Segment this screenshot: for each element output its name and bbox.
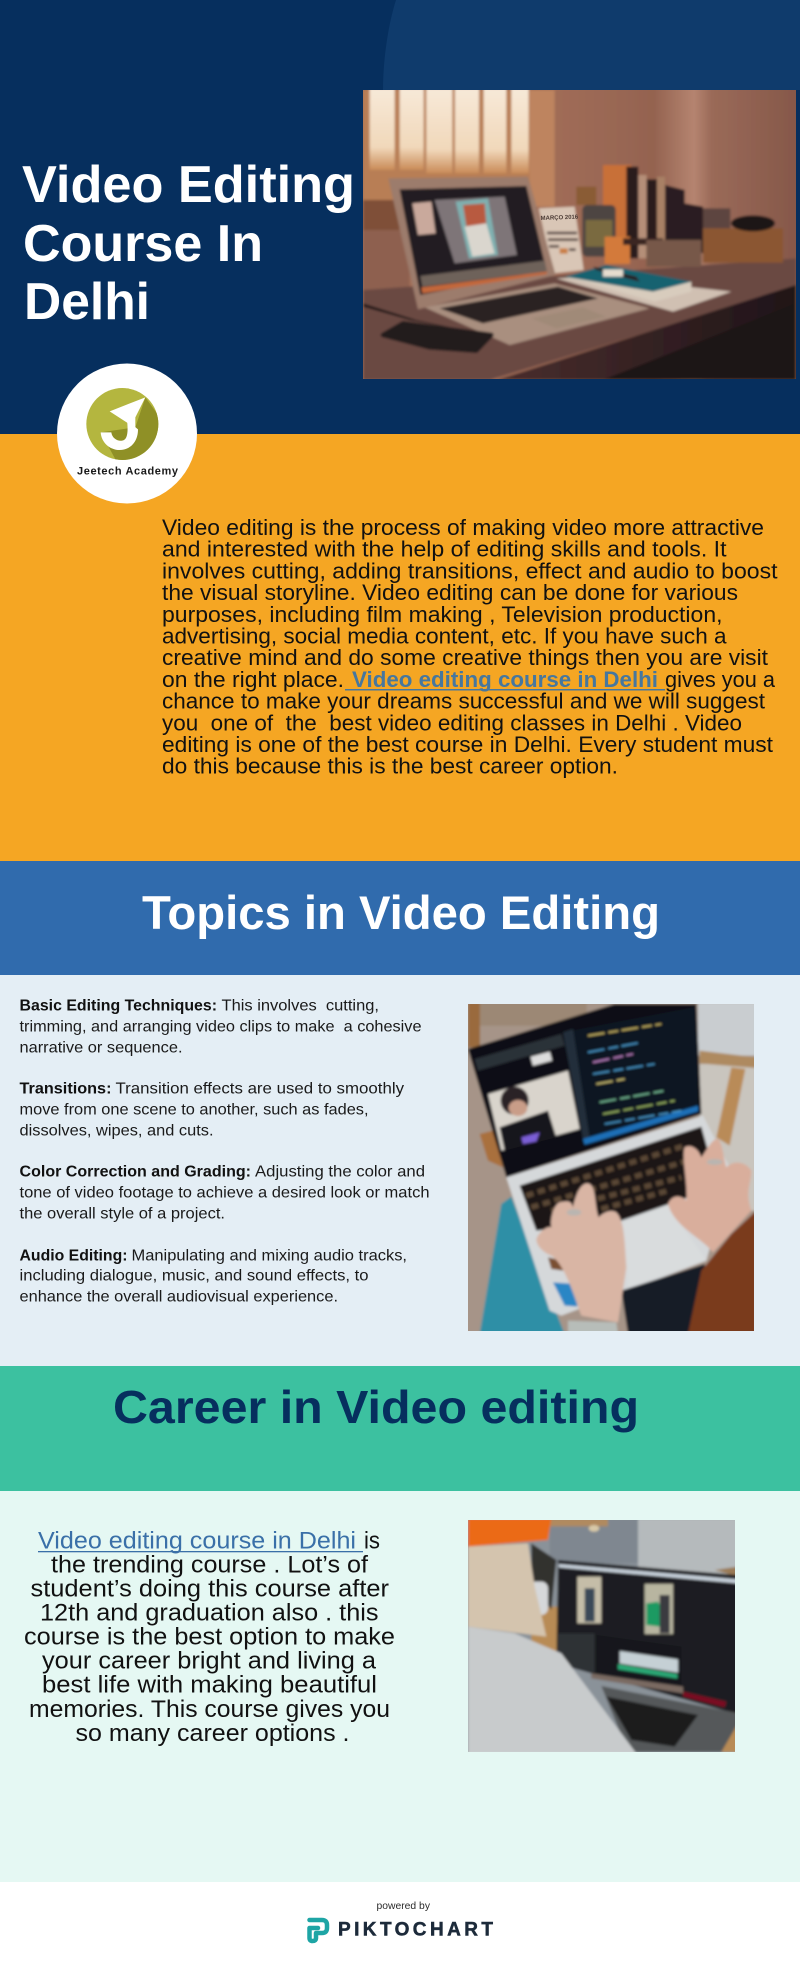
topic: basic editing techniques: This involves cutting,: [222, 998, 379, 1014]
intro paragraph: gives you a: [665, 667, 776, 692]
title: Video Editing: [22, 156, 355, 214]
panel: topics body background: [0, 975, 800, 1366]
intro paragraph: the visual storyline. Video editing can be done for various: [162, 580, 738, 605]
intro paragraph: advertising, social media content, etc. If you have such a: [162, 624, 727, 648]
career paragraph: best life with making beautiful: [42, 1672, 377, 1699]
intro paragraph: editing is one of the best course in Delhi. Every student must: [162, 732, 773, 757]
title: Course In: [23, 215, 263, 273]
logo badge: Jeetech Academy: Jeetech Academy: [77, 466, 179, 478]
heading: career: Career in Video editing: [113, 1381, 639, 1433]
topic: audio editing: [20, 1248, 407, 1306]
topic: color correction and grading: Color Correction and Grading:: [20, 1164, 251, 1180]
photo: editor working on a video timeline: [465, 1517, 738, 1753]
panel: topics header band: [0, 861, 800, 975]
topic: audio editing: enhance the overall audiovisual experience.: [20, 1288, 338, 1306]
topic: audio editing: Manipulating and mixing audio tracks,: [132, 1248, 407, 1264]
career paragraph: 12th and graduation also . this: [40, 1600, 378, 1627]
icon: J emblem: [86, 388, 158, 460]
topic: transitions: Transition effects are used to smoothly: [116, 1080, 404, 1098]
topic: basic editing techniques: trimming, and arranging video clips to make a cohesive: [20, 1018, 422, 1036]
intro paragraph: and interested with the help of editing skills and tools. It: [162, 537, 726, 562]
photo: hands typing on a laptop during a video call: [465, 1001, 758, 1334]
panel: navy hero background: [0, 0, 800, 434]
intro paragraph: purposes, including film making , Television production,: [162, 602, 722, 627]
title: [22, 156, 355, 331]
career paragraph: so many career options .: [76, 1720, 350, 1747]
inline link: Video editing course in Delhi: Video editing course in Delhi: [38, 1528, 356, 1554]
intro paragraph: Video editing is the process of making video more attractive: [162, 515, 764, 540]
footer: Piktochart wordmark: PIKTOCHART: [338, 1920, 493, 1940]
topic: transitions: Transitions:: [20, 1080, 111, 1098]
topic: color correction and grading: tone of video footage to achieve a desired look or match: [20, 1184, 430, 1202]
intro paragraph: you one of the best video editing classes in Delhi . Video: [162, 710, 742, 735]
topic: transitions: dissolves, wipes, and cuts.: [20, 1122, 214, 1140]
intro paragraph: creative mind and do some creative things then you are visit: [162, 645, 768, 670]
topic: audio editing: including dialogue, music, and sound effects, to: [20, 1268, 369, 1284]
topic: transitions: [20, 1080, 404, 1140]
intro paragraph: involves cutting, adding transitions, effect and audio to boost: [162, 558, 777, 583]
intro paragraph: on the right place.: [162, 667, 344, 692]
topic: transitions: move from one scene to another, such as fades,: [20, 1102, 368, 1118]
career paragraph: course is the best option to make: [24, 1624, 395, 1651]
panel: footer white band: [0, 1882, 800, 1962]
icon: Piktochart logo mark: [310, 1920, 327, 1941]
title: Delhi: [24, 273, 150, 331]
panel: orange intro background: [0, 434, 800, 861]
calendar label: MARÇO 2016: [541, 215, 579, 222]
logo badge: Jeetech Academy: [57, 364, 197, 504]
panel: career header band: [0, 1366, 800, 1491]
topic: color correction and grading: Adjusting the color and: [255, 1164, 425, 1180]
intro paragraph: [162, 515, 777, 779]
career paragraph: the trending course . Lot’s of: [51, 1552, 368, 1578]
career paragraph: memories. This course gives you: [29, 1696, 390, 1723]
topic: basic editing techniques: narrative or sequence.: [20, 1040, 182, 1056]
photo: laptop on a warm-toned desk: [360, 87, 800, 383]
topic: color correction and grading: [20, 1164, 430, 1222]
topic: basic editing techniques: Basic Editing Techniques:: [20, 998, 217, 1014]
panel: career body background: [0, 1491, 800, 1882]
career paragraph: [24, 1528, 395, 1747]
topic: basic editing techniques: [20, 998, 422, 1056]
career paragraph: student’s doing this course after: [30, 1576, 389, 1603]
intro paragraph: do this because this is the best career option.: [162, 754, 618, 779]
career paragraph: is: [364, 1528, 380, 1554]
topic: color correction and grading: the overall style of a project.: [20, 1206, 225, 1222]
intro paragraph: chance to make your dreams successful and we will suggest: [162, 689, 765, 714]
inline link: Video editing course in Delhi: Video editing course in Delhi: [352, 667, 658, 692]
heading: topics: Topics in Video Editing: [142, 886, 660, 939]
decorative lighter corner shape: [383, 0, 800, 90]
topic: audio editing: Audio Editing:: [20, 1248, 128, 1264]
career paragraph: your career bright and living a: [42, 1648, 377, 1675]
footer: powered by label: powered by: [376, 1900, 431, 1912]
